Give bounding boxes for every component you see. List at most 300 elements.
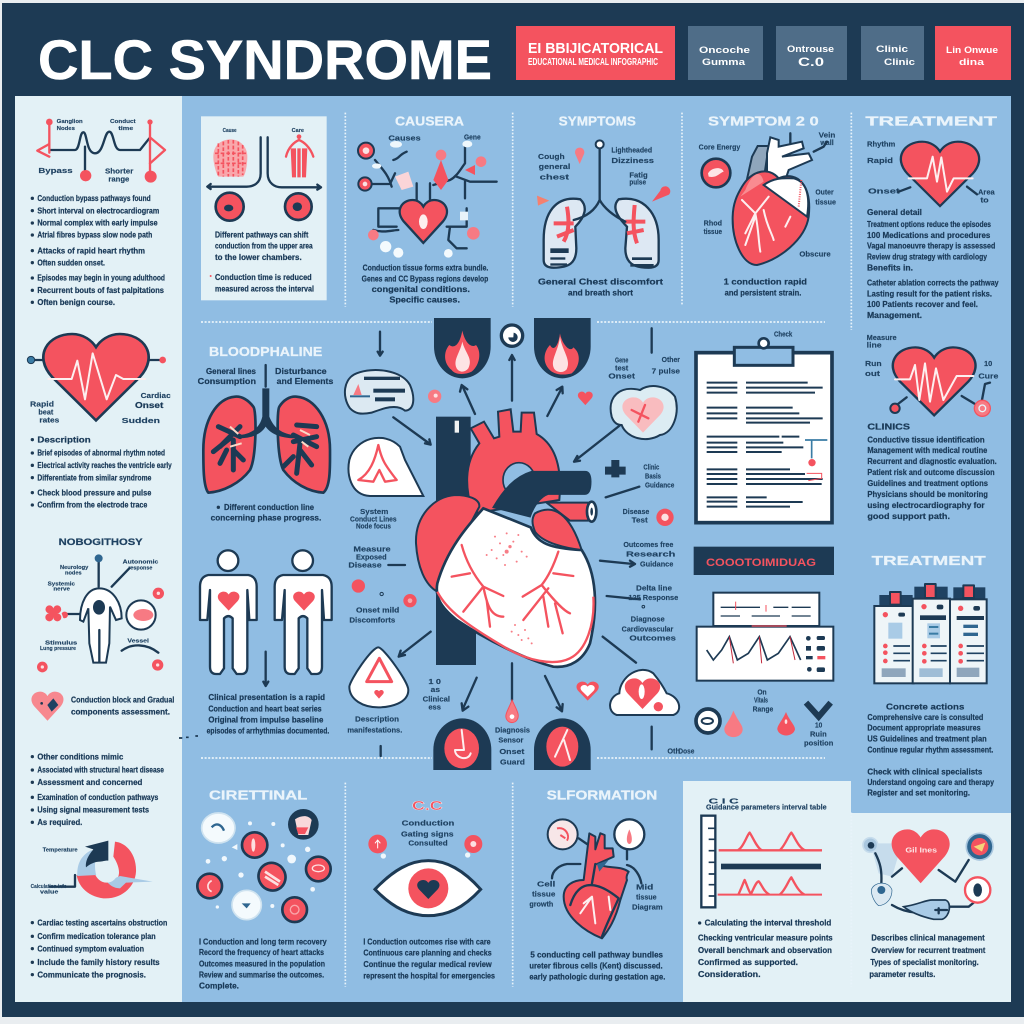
text block: left bullets two: Description	[37, 434, 91, 444]
icon: second ECG heart: line	[867, 340, 882, 349]
lower-right content	[513, 783, 993, 987]
panel: symptom 2: Rhod	[704, 218, 722, 227]
outlined heart	[577, 682, 599, 701]
panel: blood pathology: and Elements	[277, 376, 334, 386]
diagram: body anatomy: nerve	[53, 587, 70, 593]
labels around heart: Guidance	[640, 560, 673, 569]
panel: eye: Conduction	[402, 819, 455, 828]
text: pink heart caption: Conduction block and Gradual	[71, 695, 174, 705]
diagram: heart network	[863, 829, 993, 919]
text block: left bullets three: Assessment and concerned	[37, 777, 142, 787]
icon: second ECG heart: 10	[984, 359, 992, 368]
diagram: ECG waveform: Nodes	[57, 126, 75, 132]
panel: symptom 2: Vein	[819, 131, 836, 140]
panel: symptoms: Dizziness	[611, 156, 654, 165]
panel: symptoms: General Chest discomfort	[538, 277, 663, 287]
labels around heart: Basis	[645, 471, 661, 480]
panel: treatment top: General detail	[867, 207, 922, 217]
panel: eye: Gating signs	[401, 830, 454, 839]
labels around heart: Onset mild	[356, 606, 399, 615]
labels around heart: test	[615, 364, 629, 373]
arrow: figures down	[263, 652, 268, 686]
panel: chart: Consideration.	[698, 969, 761, 979]
panel: symptoms: Fatig	[629, 171, 648, 180]
text block: left bullets two: Electrical activity reaches the ventricle early	[37, 460, 172, 470]
text: pink heart caption	[71, 695, 174, 716]
chart: donut cycle	[31, 841, 153, 898]
panel: symptoms: and breath short	[568, 287, 633, 297]
icon: anatomical heart	[733, 133, 827, 265]
text block: left bullets one: Short interval on electrocardiogram	[37, 205, 160, 215]
text block: left bullets one	[31, 193, 165, 307]
text block: left bullets four	[31, 917, 167, 979]
panel: circulation: Outcomes measured in the population	[199, 958, 325, 968]
panel: eye: Continuous care planning and checks	[363, 948, 492, 958]
text block: left bullets three: Using signal measurement tests	[37, 805, 149, 815]
icons: bottom row: 10	[815, 720, 822, 729]
heading: biography: NOBOGITHOSY	[59, 537, 143, 547]
clock icon	[501, 325, 523, 346]
panel: blood pathology: BLOODPHALINE	[209, 344, 322, 359]
icon: second ECG heart	[865, 333, 998, 416]
banner: red heading: COOOTOIMIDUAG	[706, 557, 816, 569]
panel: circulation: I Conduction and long term recovery	[199, 936, 327, 946]
panel: symptom 2: tissue	[704, 227, 722, 236]
badge: one	[688, 26, 763, 80]
labels around heart: Gene	[615, 356, 628, 365]
text block: left bullets one: Recurrent bouts of fast palpitations	[37, 285, 164, 295]
labels around heart: Test	[632, 516, 648, 525]
badge: three: Clinic	[876, 44, 908, 55]
middle-left content	[27, 334, 334, 738]
text block: therapy: good support path.	[867, 511, 950, 521]
labels around heart: Guidance	[645, 480, 674, 489]
panel: eye: represent the hospital for emergencies	[363, 970, 495, 980]
panel: connected heart: Gil Ines	[905, 847, 937, 854]
panel: formation: SLFORMATION	[547, 787, 657, 802]
icon: second ECG heart: Measure	[867, 333, 897, 342]
panel: conduction comparison card	[201, 116, 327, 300]
upper-left quadrant content	[31, 113, 497, 307]
panel: chart: Calculating the interval threshold	[705, 918, 831, 928]
labels: heart: beat	[38, 408, 54, 417]
diagram: ECG waveform: Shorter	[105, 167, 133, 176]
icons: bottom row	[678, 688, 834, 755]
panel: conduction comparison card: to the lower chambers.	[215, 252, 302, 262]
panel: formation: early pathologic during gestation age.	[529, 971, 665, 981]
bubble: text note	[345, 370, 413, 414]
diagram: body anatomy: Lung pressure	[40, 646, 76, 652]
labels around heart: Node focus	[356, 522, 391, 531]
icon: red lungs	[203, 365, 330, 493]
icon: diverging arrows	[207, 137, 321, 190]
panel: formation	[529, 787, 665, 981]
labels around heart	[347, 355, 681, 767]
panel: formation: tissue	[636, 893, 657, 902]
icon: muscle tissue	[213, 139, 247, 177]
panel: chart: C I C	[709, 796, 740, 805]
text block: treatment details: Register and set monitoring.	[867, 787, 970, 797]
panel: chart: Guidance parameters interval table	[706, 802, 827, 811]
icon: second ECG heart: Cure	[978, 371, 998, 380]
panel: treatment top: TREATMENT	[865, 113, 997, 128]
panel: formation: Cell	[537, 880, 555, 889]
diagram: ECG waveform: Ganglion	[57, 119, 83, 125]
badge: four	[935, 26, 1011, 80]
panel: symptom 2	[699, 113, 836, 297]
badge: three: Clinic	[884, 57, 915, 68]
labels: heart: Onset	[135, 400, 163, 410]
labels around heart: Discomforts	[349, 615, 395, 624]
badge: two: C.0	[798, 55, 824, 69]
labels around heart: Other	[662, 355, 680, 364]
labels around heart: Guard	[500, 758, 525, 767]
text block: therapy: Guidelines and treatment options	[867, 478, 988, 488]
labels around heart: 7 pulse	[652, 366, 680, 375]
text block: left bullets one: Atrial fibres bypass slow node path	[37, 230, 152, 240]
text block: left bullets one: Episodes may begin in young adulthood	[37, 273, 165, 283]
panel: treatment top: Treatment options reduce the episodes	[867, 219, 991, 229]
triangle bubble	[349, 647, 408, 707]
labels around heart: ess	[428, 703, 441, 712]
panel: formation: 5 conducting cell pathway bundles	[530, 949, 663, 959]
badge: two: Ontrouse	[787, 44, 834, 55]
text block: therapy	[867, 422, 997, 521]
icons: bottom row: Ruin	[810, 730, 827, 739]
panel: chart: Overall benchmark and observation	[698, 945, 832, 955]
panel: eye: Continue the regular medical review	[363, 959, 492, 969]
panel: symptoms: SYMPTOMS	[559, 113, 636, 128]
icons: bottom row: On	[757, 688, 767, 697]
panel: symptoms: Lightheaded	[611, 145, 652, 154]
labels around heart: Measure	[353, 544, 391, 553]
labels around heart: Outcomes free	[623, 540, 673, 549]
panel: causes: Genes and CC Bypass regions develop	[362, 273, 488, 283]
icon: treatment cards	[874, 584, 987, 683]
icon: plus	[605, 460, 626, 477]
arrows around heart	[378, 328, 652, 756]
panel: eye: I Conduction outcomes rise with care	[363, 936, 491, 946]
text block: treatment details: US Guidelines and treatment plan	[867, 734, 987, 744]
icon: second ECG heart: out	[865, 369, 881, 378]
text block: left bullets three: Associated with structural heart disease	[37, 765, 164, 775]
panel: left column background	[15, 96, 182, 1002]
diagram: body anatomy: nodes	[65, 570, 82, 576]
diagram: body anatomy: Neurology	[60, 565, 89, 571]
labels around heart: Conduct Lines	[350, 515, 397, 524]
labels: heart: rates	[39, 416, 59, 425]
icon: formation heart	[548, 819, 644, 938]
panel: treatment top: to	[980, 196, 989, 205]
text block: left bullets three	[31, 751, 164, 827]
panel: conduction comparison card: conduction from the upper area	[215, 241, 313, 251]
badge: one: Oncoche	[699, 45, 750, 56]
panel: lower middle background	[683, 781, 851, 1002]
badge: four: Lin Onwue	[946, 45, 998, 56]
diagram: ECG waveform: time	[118, 126, 133, 132]
labels around heart: Description	[355, 715, 400, 724]
text block: left bullets four: Continued symptom evaluation	[37, 943, 144, 953]
panel: chart: Checking ventricular measure points	[698, 933, 833, 943]
labels around heart: Outcomes	[629, 634, 676, 643]
labels around heart: as	[431, 685, 440, 694]
panel: connected heart: Overview for recurrent treatment	[871, 945, 985, 955]
panel: symptom 2: Core Energy	[699, 143, 741, 152]
dark column	[436, 417, 476, 665]
panel: treatment top	[865, 113, 999, 320]
text block: therapy: CLINICS	[867, 422, 910, 432]
panel: treatment top: Area	[978, 187, 996, 196]
text block: left bullets two: Brief episodes of abnormal rhythm noted	[37, 448, 165, 458]
diagram: ECG waveform: range	[108, 174, 129, 183]
icons: bottom row: position	[804, 738, 834, 747]
labels: heart: Rapid	[30, 399, 54, 408]
panel: causes: congenital conditions.	[372, 284, 470, 294]
text block: therapy: Patient risk and outcome discussion	[867, 467, 995, 477]
diagram: body anatomy: response	[128, 565, 152, 571]
text block: treatment details: Document appropriate measures	[867, 723, 981, 733]
panel: circulation	[197, 787, 331, 990]
center heart diagram	[345, 318, 681, 770]
text block: left bullets four: Cardiac testing ascertains obstruction	[37, 917, 167, 927]
panel: connected heart: parameter results.	[869, 969, 935, 979]
panel: conduction comparison card: Different pathways can shift	[215, 230, 308, 240]
labels around heart: Research	[626, 550, 676, 559]
bottom shields	[433, 718, 591, 770]
labels around heart: Diagnose	[631, 615, 665, 624]
banner: red heading	[694, 547, 834, 575]
panel: treatment top: Management.	[867, 310, 922, 320]
labels around heart: System	[360, 507, 389, 516]
panel: treatment top: 100 Medications and procedures	[867, 230, 990, 240]
panel: treatment top: Benefits in.	[867, 262, 913, 272]
panel: causes: Causes	[388, 134, 421, 143]
panel: circulation: CIRETTINAL	[209, 787, 307, 802]
panel: treatment top: Review drug strategy with cardiology	[867, 251, 987, 261]
upper-right quadrant content	[513, 113, 999, 330]
panel: symptom 2: and persistent strain.	[725, 287, 801, 297]
text block: treatment details: Check with clinical specialists	[867, 766, 982, 776]
text block: figures caption	[207, 692, 329, 735]
icon: eye with heart	[368, 835, 482, 916]
icon: second ECG heart: Run	[865, 359, 882, 368]
chart: donut cycle: Calculation info	[31, 884, 67, 890]
labels around heart: Diagnosis	[495, 725, 530, 734]
drop pin	[506, 700, 518, 723]
panel: conduction comparison card: Conduction time is reduced	[215, 272, 312, 282]
labels around heart: Onset	[608, 372, 636, 381]
diagram: body anatomy	[37, 554, 164, 672]
badge: educational: EDUCATIONAL MEDICAL INFOGRAPHIC	[528, 57, 658, 68]
diagram: ECG waveform: Conduct	[110, 119, 136, 125]
panel: treatment top: Rhythm	[867, 140, 896, 149]
labels around heart: Delta line	[636, 584, 672, 593]
panel: blood pathology: concerning phase progress.	[211, 513, 321, 523]
panel: causes	[358, 113, 497, 305]
icon: two human figures	[200, 550, 332, 674]
badge: one: Gumma	[702, 57, 746, 68]
text block: treatment details: Concrete actions	[886, 701, 965, 711]
big heart	[416, 409, 596, 667]
panel: circulation: Complete.	[199, 980, 239, 990]
text block: figures caption: Original from impulse baseline	[208, 714, 323, 724]
lower-left content	[31, 751, 495, 990]
icons: bottom row: Vitals	[754, 696, 768, 705]
chart: donut cycle: Temperature	[43, 847, 78, 853]
panel: blood pathology: General lines	[206, 366, 256, 376]
labels around heart: Exposed	[356, 552, 387, 561]
text block: left bullets four: Communicate the prognosis.	[37, 969, 146, 979]
labels around heart: Oth	[667, 746, 681, 755]
panel: lower right background	[850, 813, 1011, 1002]
icon: pink heart	[31, 692, 64, 721]
text block: therapy: Management with medical routine	[867, 445, 987, 455]
text block: therapy: Conductive tissue identification	[867, 434, 985, 444]
top flame shields	[434, 318, 591, 378]
panel: symptoms: pulse	[629, 177, 646, 186]
labels: heart	[30, 391, 171, 425]
panel: symptom 2: Obscure	[799, 249, 831, 258]
horizontal dashed dividers	[201, 322, 825, 758]
bubble: heart cloud	[611, 386, 677, 439]
text: pink heart caption: components assessment.	[71, 706, 170, 716]
icon: heart with ECG	[27, 334, 166, 420]
panel: formation: tissue	[532, 889, 555, 898]
text block: left bullets two	[31, 434, 172, 510]
panel: blood pathology: Different conduction line	[224, 502, 314, 512]
text block: figures caption: Clinical presentation is a rapid	[208, 692, 325, 702]
panel: treatment top: 100 Patients recover and feel.	[867, 299, 978, 309]
text block: left bullets one: Attacks of rapid heart rhythm	[37, 245, 145, 255]
header badges	[516, 26, 1011, 80]
panel: chart: Confirmed as supported.	[698, 957, 798, 967]
diagram: body anatomy: Vessel	[127, 639, 150, 645]
text block: left bullets two: Check blood pressure and pulse	[37, 487, 151, 497]
panel: treatment top: Rapid	[867, 156, 893, 165]
text block: left bullets three: Examination of conduction pathways	[37, 792, 158, 802]
bubble: red peak	[349, 438, 423, 496]
panel: connected heart: Describes clinical management	[871, 933, 985, 943]
panel: formation: Mid	[636, 883, 653, 892]
panel: treatment top: Onset	[868, 187, 900, 196]
panel: blood pathology	[198, 344, 334, 523]
panel: eye	[363, 798, 495, 980]
text block: left bullets one: Normal complex with early impulse	[37, 218, 158, 228]
text block: left bullets two: Confirm from the electrode trace	[37, 500, 147, 510]
labels around heart: Clinical	[423, 695, 450, 704]
labels: heart: Cardiac	[141, 391, 171, 400]
icon: red circle left	[216, 193, 244, 221]
panel: causes: Specific causes.	[389, 295, 460, 305]
badge: educational: EI BBIJICATORICAL	[528, 40, 663, 57]
main blue area	[182, 96, 1011, 1002]
cloud bubble	[610, 670, 679, 715]
chart: peak traces	[701, 816, 822, 907]
panel: eye: Consulted	[408, 838, 448, 847]
diagram: body anatomy: Systemic	[48, 581, 75, 587]
diagram: body anatomy: Autonomic	[123, 559, 158, 565]
text block: left bullets two: Differentiate from similar syndrome	[37, 472, 151, 482]
icons: bottom row: Range	[753, 705, 773, 714]
text block: figures caption: episodes of arrhythmias documented.	[207, 725, 329, 735]
panel: symptoms: Cough	[538, 152, 565, 161]
text block: left bullets one: Conduction bypass pathways found	[37, 193, 151, 203]
text block: treatment details: Comprehensive care is consulted	[867, 712, 983, 722]
text block: treatment details	[867, 701, 994, 797]
text block: left bullets three: As required.	[37, 817, 82, 827]
labels around heart: Onset	[499, 747, 525, 756]
panel: symptom 2: tissue	[815, 198, 836, 207]
text block: left bullets one: Often sudden onset.	[37, 257, 105, 267]
panel: formation: ureter fibrous cells (Kent) discussed.	[529, 960, 663, 970]
text block: left bullets four: Include the family history results	[37, 957, 160, 967]
diagram: ECG waveform	[37, 119, 165, 183]
title: CLC SYNDROME	[38, 28, 492, 91]
text block: treatment details: Continue regular rhythm assessment.	[867, 745, 993, 755]
text block: therapy: Recurrent and diagnostic evaluation.	[867, 456, 997, 466]
text block: figures caption: Conduction and heart beat series	[208, 703, 322, 713]
panel: symptom 2: SYMPTOM 2 0	[708, 113, 819, 128]
diagram: ECG waveform: Bypass	[38, 166, 73, 175]
icon: ECG heart	[899, 142, 979, 206]
icon: causes heart	[400, 200, 447, 243]
labels around heart: Sensor	[498, 736, 523, 745]
panel: symptoms: general	[539, 162, 570, 171]
labels around heart: 1 0	[428, 677, 441, 686]
panel: circulation: Review and summarise the outcomes.	[199, 970, 324, 980]
panel: treatment top: Vagal manoeuvre therapy is assessed	[867, 241, 995, 251]
panel: circulation: Record the frequency of heart attacks	[199, 947, 324, 957]
icon: clipboard report	[696, 330, 832, 523]
diagram: network	[358, 141, 497, 258]
panel: conduction comparison card: Cause	[223, 128, 237, 134]
icon: small red disc	[702, 159, 730, 187]
labels around heart: Clinic	[643, 462, 659, 471]
icon: red dots	[352, 390, 674, 608]
labels around heart: Cardiovascular	[622, 624, 673, 633]
panel: causes: CAUSERA	[395, 113, 464, 128]
panel: conduction comparison card: measured across the interval	[215, 283, 314, 293]
panel: symptom 2: 1 conduction rapid	[724, 277, 807, 287]
icon: body figure	[286, 134, 313, 177]
icon: lungs	[537, 140, 670, 268]
panel: symptoms	[537, 113, 670, 297]
panel: causes: Conduction tissue forms extra bundle.	[363, 262, 488, 272]
panel: symptom 2: wall	[819, 138, 834, 147]
panel: treatment top: Catheter ablation corrects the pathway	[867, 277, 999, 287]
chart: donut cycle: value	[40, 889, 58, 895]
text block: left bullets three: Other conditions mimic	[37, 751, 123, 761]
text block: left bullets one: Often benign course.	[37, 297, 115, 307]
panel: blood pathology: Consumption	[198, 376, 256, 386]
panel: formation: Diagram	[632, 902, 663, 911]
heading: treatment: TREATMENT	[872, 553, 986, 568]
text block: therapy: Physicians should be monitoring	[867, 489, 988, 499]
panel: chart	[698, 796, 833, 979]
panel: eye: C.C	[412, 798, 443, 813]
panel: connected heart	[863, 829, 993, 979]
panel: causes: Gene	[464, 133, 481, 142]
icon: ECG monitor	[697, 593, 833, 681]
middle-right content	[678, 330, 998, 797]
panel: blood pathology: Disturbance	[275, 366, 327, 376]
labels around heart: manifestations.	[347, 726, 402, 735]
icon: red circle right	[285, 193, 312, 220]
panel: symptom 2: Outer	[815, 187, 834, 196]
labels around heart: Disease	[348, 560, 382, 569]
diagram: body anatomy: Stimulus	[45, 640, 77, 646]
text block: left bullets four: Confirm medication tolerance plan	[37, 931, 156, 941]
